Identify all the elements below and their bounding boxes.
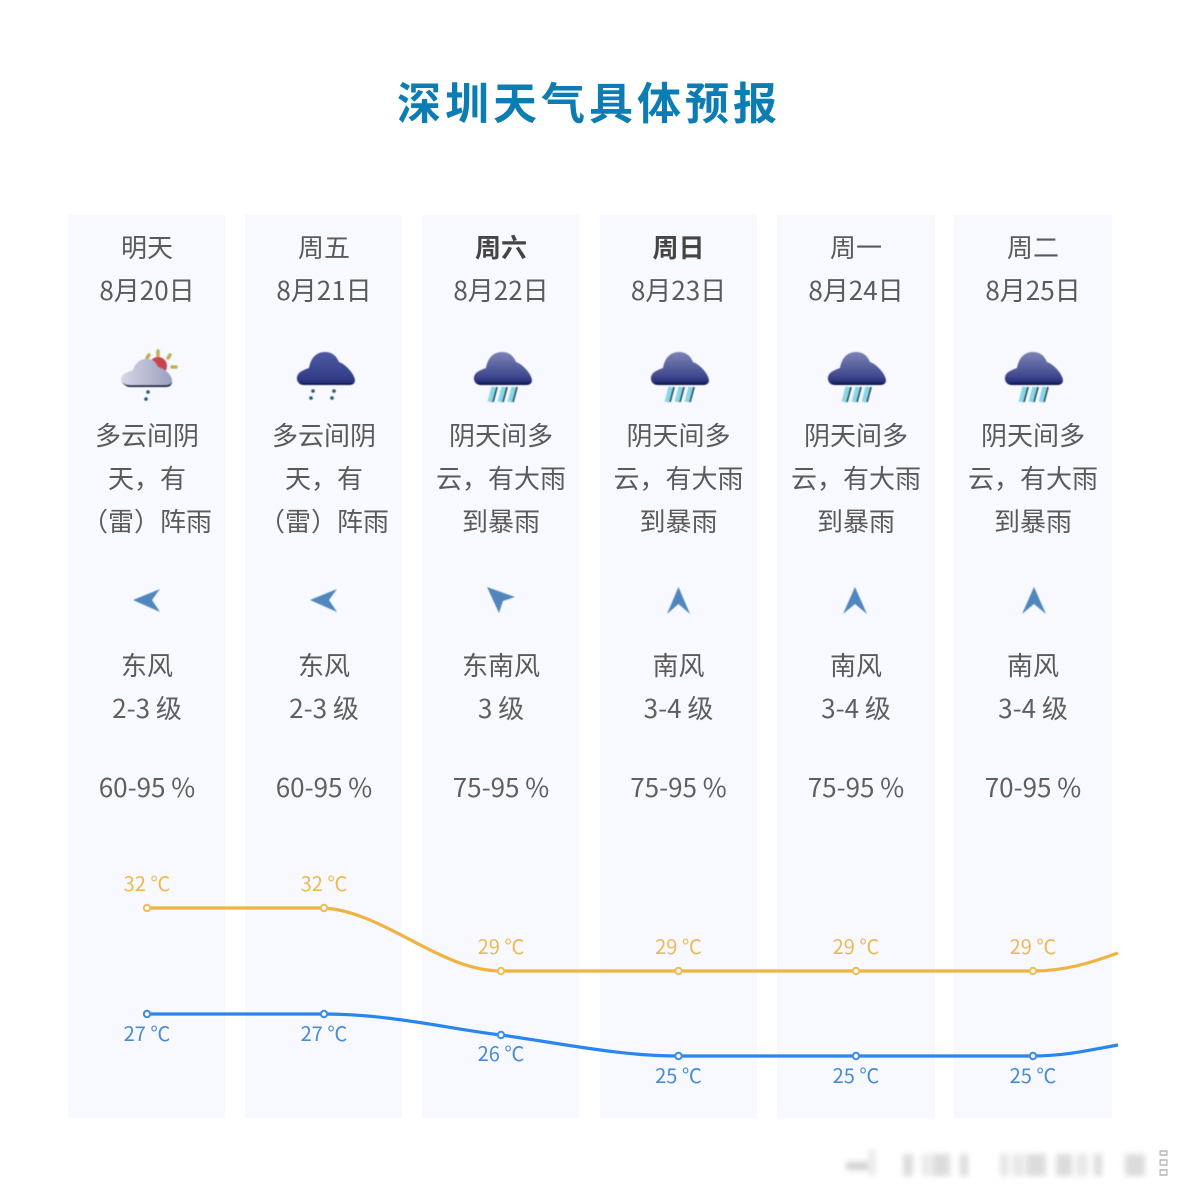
wind text: 南风 [830, 646, 882, 683]
weather description: 阴天间多 [449, 416, 553, 453]
panel: 8月22日 [422, 215, 579, 1118]
date heading: 8月21日 [276, 271, 372, 308]
wind text: 南风 [1007, 646, 1059, 683]
weather description [259, 416, 389, 539]
humidity: 60-95 % [276, 768, 372, 805]
date heading [276, 228, 372, 308]
weather description: 到暴雨 [817, 502, 895, 539]
weather description: 多云间阴 [272, 416, 376, 453]
weather description: 到暴雨 [462, 502, 540, 539]
date heading: 8月22日 [453, 271, 549, 308]
icon: wind arrow southeast [487, 587, 515, 613]
date heading: 周二 [1007, 228, 1059, 265]
date heading: 8月25日 [985, 271, 1081, 308]
weather description: 到暴雨 [994, 502, 1072, 539]
wind text [821, 646, 891, 726]
chart: high temperature line [124, 868, 1118, 974]
icon: wind arrow east [133, 589, 160, 612]
weather description: 天，有 [285, 459, 363, 496]
panel: 8月21日 [245, 215, 402, 1118]
wind text: 3-4 级 [821, 689, 891, 726]
weather description [82, 416, 212, 539]
wind text: 2-3 级 [112, 689, 182, 726]
date heading [808, 228, 904, 308]
wind text: 2-3 级 [289, 689, 359, 726]
icon: heavy rain cloud [1005, 352, 1063, 402]
icon: partly cloudy with shower [121, 351, 176, 401]
weather description [436, 416, 566, 539]
date heading: 明天 [121, 228, 173, 265]
wind text: 东风 [298, 646, 350, 683]
wind text: 东风 [121, 646, 173, 683]
weather description: 到暴雨 [639, 502, 718, 539]
wind text [289, 646, 359, 726]
high temperature labels: 29 ℃ [1010, 931, 1056, 960]
blurred watermark [846, 1150, 1145, 1176]
wind text [644, 646, 713, 726]
wind text [462, 646, 540, 726]
icon: heavy rain cloud [474, 352, 532, 402]
date heading: 周六 [475, 228, 527, 265]
high temperature labels: 29 ℃ [478, 931, 524, 960]
icon: wind arrow east [310, 589, 337, 612]
date heading [99, 228, 195, 308]
weather description: 云，有大雨 [436, 459, 566, 496]
low temperature labels: 25 ℃ [833, 1060, 879, 1089]
weather description: 云，有大雨 [791, 459, 921, 496]
high temperature labels: 32 ℃ [301, 868, 347, 897]
high temperature labels: 29 ℃ [655, 931, 702, 960]
date heading: 周日 [652, 228, 705, 265]
low temperature labels: 27 ℃ [301, 1018, 347, 1047]
humidity: 60-95 % [99, 768, 195, 805]
weather description: 多云间阴 [95, 416, 199, 453]
low temperature labels: 25 ℃ [655, 1060, 702, 1089]
panel: 8月25日 [954, 215, 1112, 1118]
weather description [791, 416, 921, 539]
humidity: 75-95 % [808, 768, 904, 805]
icon: dark cloud with shower [297, 352, 355, 400]
low temperature labels [124, 1018, 1056, 1089]
icon: heavy rain cloud [651, 352, 709, 402]
wind text: 3 级 [478, 689, 524, 726]
icon: wind arrow south [667, 587, 690, 614]
date heading: 8月24日 [808, 271, 904, 308]
date heading [985, 228, 1081, 308]
weather description: 天，有 [108, 459, 186, 496]
date heading: 周五 [298, 228, 350, 265]
humidity: 70-95 % [985, 768, 1081, 805]
weather description [613, 416, 744, 539]
date heading: 8月23日 [631, 271, 726, 308]
icon: wind arrow south [843, 587, 867, 614]
wind text: 3-4 级 [644, 689, 713, 726]
weather description: （雷）阵雨 [259, 502, 389, 539]
date heading: 8月20日 [99, 271, 195, 308]
weather description: 阴天间多 [804, 416, 908, 453]
watermark mark [1160, 1151, 1167, 1175]
weather description: 阴天间多 [981, 416, 1085, 453]
wind text: 东南风 [462, 646, 540, 683]
panel: 8月24日 [777, 215, 935, 1118]
high temperature labels: 32 ℃ [124, 868, 170, 897]
low temperature labels: 25 ℃ [1010, 1060, 1056, 1089]
humidity: 75-95 % [630, 768, 727, 805]
title: 深圳天气具体预报 [397, 68, 781, 132]
humidity: 75-95 % [453, 768, 549, 805]
weather description: （雷）阵雨 [82, 502, 212, 539]
wind text: 南风 [652, 646, 705, 683]
low temperature labels: 26 ℃ [478, 1038, 524, 1067]
date heading: 周一 [830, 228, 882, 265]
wind text [998, 646, 1068, 726]
panel: 8月20日 [68, 215, 225, 1118]
wind text [112, 646, 182, 726]
chart: low temperature line [124, 1011, 1118, 1089]
high temperature labels [124, 868, 1056, 960]
wind text: 3-4 级 [998, 689, 1068, 726]
high temperature labels: 29 ℃ [833, 931, 879, 960]
date heading [631, 228, 726, 308]
weather description [968, 416, 1098, 539]
icon: heavy rain cloud [828, 352, 886, 402]
weather description: 云，有大雨 [613, 459, 744, 496]
weather description: 云，有大雨 [968, 459, 1098, 496]
panel: 8月23日 [600, 215, 757, 1118]
date heading [453, 228, 549, 308]
icon: wind arrow south [1022, 587, 1046, 614]
low temperature labels: 27 ℃ [124, 1018, 170, 1047]
weather description: 阴天间多 [626, 416, 731, 453]
